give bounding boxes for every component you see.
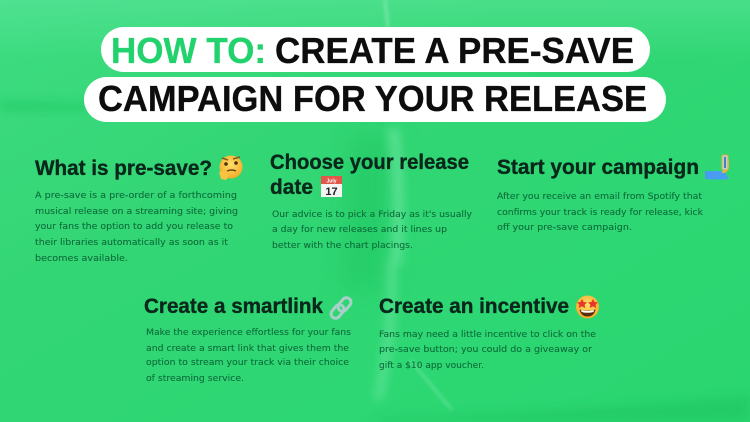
heading: choose your release date: Choose your release [270, 150, 469, 174]
icon: thinking face [219, 156, 242, 180]
body text: what is pre-save: your fans the option to add you release to [35, 222, 233, 232]
panel: create a smartlink [144, 294, 353, 384]
title [84, 27, 666, 122]
body text: create an incentive: Fans may need a little incentive to click on the [379, 330, 596, 340]
title pill: line two: CAMPAIGN FOR YOUR RELEASE [98, 78, 647, 119]
title pill: line one [101, 27, 650, 72]
body text: start your campaign: After you receive an email from Spotify that [497, 192, 703, 202]
body text: what is pre-save: A pre-save is a pre-order of a forthcoming [35, 191, 237, 201]
heading: choose your release date: date [270, 175, 313, 199]
panel: start your campaign [497, 155, 729, 233]
body text: create a smartlink: option to stream your track via their choice [146, 358, 349, 368]
body text: what is pre-save: their libraries automatically as soon as it [35, 238, 229, 248]
body text: create an incentive: gift a $10 app voucher. [379, 361, 484, 371]
icon: chain link [329, 296, 353, 320]
body text: choose your release date: a day for new releases and it lines up [272, 225, 447, 235]
body text: what is pre-save [35, 191, 238, 264]
icon: star-struck face [576, 296, 599, 318]
body text: create a smartlink: and create a smart link that gives them the [146, 344, 349, 354]
heading: start your campaign: Start your campaign [497, 155, 699, 179]
icon: calendar: July [326, 178, 337, 184]
body text: start your campaign: off your pre-save campaign. [497, 223, 632, 233]
body text: what is pre-save: musical release on a streaming site; giving [35, 207, 238, 217]
heading: what is pre-save: What is pre-save? [35, 156, 212, 180]
panel: what is pre-save [35, 156, 242, 264]
panel: choose your release date [270, 150, 472, 251]
icon: calendar: 17 [325, 186, 338, 198]
body text: create a smartlink: of streaming service. [146, 374, 244, 384]
body text: create an incentive [379, 330, 596, 371]
body text: what is pre-save: becomes available. [35, 254, 128, 264]
body text: create an incentive: pre-save button; you could do a giveaway or [379, 345, 593, 355]
panel: create an incentive [379, 294, 599, 371]
title pill: line one: HOW TO: [111, 30, 266, 71]
body text: choose your release date: better with the chart placings. [272, 241, 413, 251]
body text: start your campaign: confirms your track is ready for release, kick [497, 208, 703, 218]
icon: calendar [321, 176, 342, 198]
body text: choose your release date: Our advice is to pick a Friday as it's usually [272, 210, 472, 220]
heading: create a smartlink: Create a smartlink [144, 294, 323, 318]
body text: start your campaign [497, 192, 703, 233]
body text: create a smartlink: Make the experience effortless for your fans [146, 328, 352, 338]
heading: choose your release date [270, 150, 469, 199]
body text: create a smartlink [146, 328, 352, 384]
heading: create an incentive: Create an incentive [379, 294, 569, 318]
body text: choose your release date [272, 210, 472, 251]
icon: laptop and phone [705, 155, 729, 180]
title pill: line one: CREATE A PRE-SAVE [275, 30, 634, 71]
